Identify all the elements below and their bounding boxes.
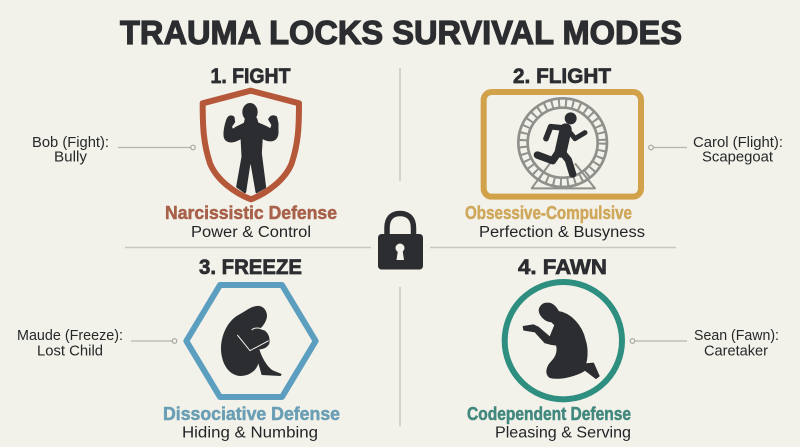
callout: Sean: Sean (Fawn): <box>694 328 779 344</box>
callout: Maude: Maude (Freeze): <box>17 328 123 344</box>
subtitle: perfection and busyness: Perfection & Busyness <box>479 224 645 241</box>
defense name: narcissistic: Narcissistic Defense <box>165 203 337 223</box>
callout: Maude: Lost Child <box>37 344 103 360</box>
panel: flight <box>465 65 645 241</box>
heading: fawn: 4. FAWN <box>518 256 607 279</box>
heading: flight: 2. FLIGHT <box>513 65 611 88</box>
callout: Carol: Scapegoat <box>702 150 773 166</box>
subtitle: hiding and numbing: Hiding & Numbing <box>182 424 318 442</box>
callout: Maude <box>17 328 177 360</box>
callout: Bob <box>32 135 195 166</box>
callout: Bob: Bob (Fight): <box>32 135 109 151</box>
panel: fight <box>165 65 337 241</box>
defense name: dissociative: Dissociative Defense <box>163 404 340 424</box>
defense name: codependent: Codependent Defense <box>467 404 631 424</box>
subtitle: power and control: Power & Control <box>191 224 311 241</box>
panel: fawn <box>467 256 631 442</box>
icon: shield with flexing figure <box>203 91 299 199</box>
callout: Bob: Bully <box>54 150 88 166</box>
icon: hexagon with curled figure <box>186 285 316 397</box>
heading: fight: 1. FIGHT <box>210 65 291 88</box>
callout: Carol: Carol (Flight): <box>693 135 783 151</box>
defense name: obsessive-compulsive: Obsessive-Compulsive <box>465 203 632 223</box>
callout: Sean <box>630 328 779 360</box>
subtitle: pleasing and serving: Pleasing & Serving <box>495 424 631 442</box>
title: TRAUMA LOCKS SURVIVAL MODES <box>120 15 682 52</box>
icon: padlock <box>378 214 423 270</box>
callout: Sean: Caretaker <box>704 344 768 360</box>
heading: freeze: 3. FREEZE <box>199 256 302 279</box>
panel: freeze <box>163 256 340 442</box>
icon: frame with runner in hamster wheel <box>484 92 641 197</box>
callout: Carol <box>649 135 783 166</box>
icon: circle with kneeling figure <box>505 282 622 399</box>
